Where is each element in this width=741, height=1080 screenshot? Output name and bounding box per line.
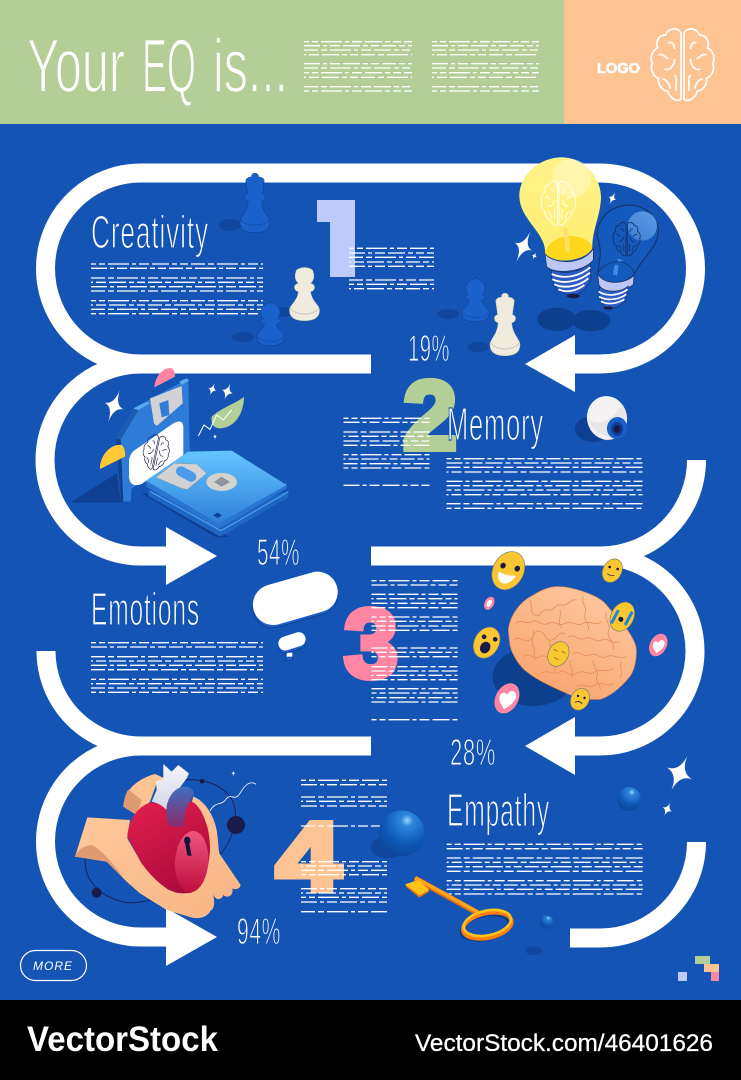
heading: Emotions: Emotions: [91, 583, 200, 635]
logo panel: [564, 0, 741, 124]
title: Your: [27, 24, 125, 109]
pulse line: [210, 783, 256, 811]
heading: Memory: Memory: [447, 398, 544, 450]
ventricle: [173, 830, 210, 893]
yellow bulb: [519, 157, 601, 298]
title: [27, 24, 288, 109]
body text left: [91, 643, 263, 692]
keyhole: [184, 837, 192, 856]
heading: Empathy: Empathy: [447, 784, 550, 836]
icon: light bulbs: [508, 157, 658, 331]
body text right: [447, 844, 643, 894]
vein: [166, 787, 194, 827]
icon: heart badges: [482, 595, 671, 718]
brain: [508, 587, 636, 699]
panel: memory: [70, 361, 642, 573]
emoji: smiling: [598, 555, 626, 586]
percentage 54: 54%: [257, 532, 300, 573]
heading: Creativity: Creativity: [91, 206, 209, 258]
more button: [20, 950, 86, 980]
title: EQ: [142, 24, 196, 109]
number 1: 1: [332, 235, 353, 277]
percentage 94: 94%: [237, 911, 281, 952]
big speech bubble: [248, 567, 343, 632]
title: is...: [213, 24, 288, 109]
icon: colour squares: [678, 956, 719, 981]
emoji: crying: [605, 598, 639, 636]
icon: speech bubbles and brain: [248, 546, 671, 718]
icon: eyeball: [575, 392, 631, 444]
brand name: VectorStock: [27, 1020, 219, 1059]
flow track: winding white arrows: [45, 173, 696, 966]
body text right: [446, 459, 642, 508]
header text column 2: [432, 42, 539, 91]
icon: brain outline: [651, 29, 714, 100]
body text left: [344, 418, 430, 485]
key: [405, 878, 514, 945]
footer watermark: [0, 1000, 741, 1080]
front hand: [75, 797, 241, 918]
number 3: 3: [344, 589, 398, 698]
icon: heart in hands: [75, 764, 256, 918]
logo wordmark: LOGO: [597, 60, 640, 77]
body text left: [301, 780, 387, 912]
small speech bubble: [277, 630, 307, 661]
number 2: 2: [403, 361, 457, 470]
sparkles: [99, 381, 236, 440]
more button: MORE: [33, 959, 74, 973]
icon: floppy disks: [70, 368, 288, 538]
panel: emotions: [91, 546, 671, 773]
aorta: [152, 764, 189, 810]
emoji: laughing: [485, 546, 531, 596]
panel: creativity: [91, 157, 658, 369]
brain shadow: [493, 647, 574, 706]
body text right: [349, 248, 434, 289]
sparkline: [198, 410, 232, 436]
number 4: 4: [276, 802, 341, 911]
icon: blue spheres, key and sparkles: [371, 750, 700, 955]
percentage 28: 28%: [450, 732, 496, 773]
blue bulb: [597, 205, 658, 310]
header text column 1: [304, 42, 412, 91]
percentage 19: 19%: [408, 328, 450, 369]
panel: empathy: [75, 750, 700, 955]
emoji: sad: [567, 685, 593, 714]
petals: [154, 368, 175, 387]
sparkles: [659, 750, 700, 818]
icon: chess pieces: [219, 173, 520, 356]
heart: [127, 800, 210, 893]
image url: VectorStock.com/46401626: [415, 1030, 713, 1057]
back hand: [123, 774, 165, 815]
header banner: [0, 0, 564, 124]
emoji: surprised: [468, 622, 505, 663]
emoji: neutral: [543, 638, 573, 670]
icon: sparkles: [508, 191, 619, 266]
brain folds: [514, 597, 627, 690]
body text right: [372, 581, 458, 720]
orbit: [85, 780, 235, 903]
spheres: [371, 787, 641, 955]
body text left: [91, 264, 263, 314]
number 1: [317, 200, 355, 277]
